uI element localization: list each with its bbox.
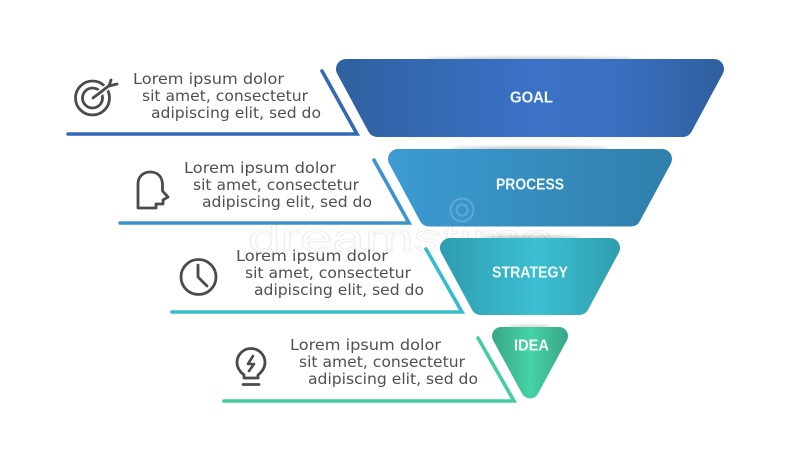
funnel segment: process (398, 147, 662, 216)
text block: goal: adipiscing elit, sed do (151, 104, 321, 122)
text block: idea: Lorem ipsum dolor (290, 336, 442, 354)
text block: strategy: Lorem ipsum dolor (236, 247, 389, 265)
watermark spiral (450, 198, 474, 222)
bracket line: process (120, 160, 409, 223)
text block: idea: adipiscing elit, sed do (308, 370, 478, 388)
funnel segment: process: PROCESS (496, 176, 564, 194)
text block: goal: sit amet, consectetur (142, 87, 309, 105)
funnel segment: goal: GOAL (510, 90, 553, 106)
text block: goal (133, 70, 321, 122)
funnel segment: idea (501, 325, 559, 390)
text block: strategy (236, 247, 424, 299)
bracket line: goal (68, 71, 357, 134)
icon: clock (181, 260, 216, 294)
watermark: dreamstime (248, 218, 553, 260)
icon: head (138, 172, 168, 208)
text block: goal: Lorem ipsum dolor (133, 70, 285, 88)
funnel segment: strategy: STRATEGY (492, 264, 569, 282)
text block: process: adipiscing elit, sed do (202, 193, 372, 211)
funnel segment: goal (346, 58, 714, 127)
text block: process: Lorem ipsum dolor (184, 159, 337, 177)
text block: process (184, 159, 372, 211)
text block: strategy: adipiscing elit, sed do (254, 281, 424, 299)
funnel segment: strategy (450, 236, 610, 305)
icon: light bulb (237, 349, 265, 384)
text block: idea (290, 336, 478, 388)
text block: process: sit amet, consectetur (193, 176, 360, 194)
bracket line: strategy (172, 249, 462, 312)
text block: idea: sit amet, consectetur (299, 353, 466, 371)
text block: strategy: sit amet, consectetur (245, 264, 412, 282)
funnel segment: idea: IDEA (514, 338, 549, 354)
icon: target (76, 80, 117, 115)
bracket line: idea (224, 338, 514, 401)
